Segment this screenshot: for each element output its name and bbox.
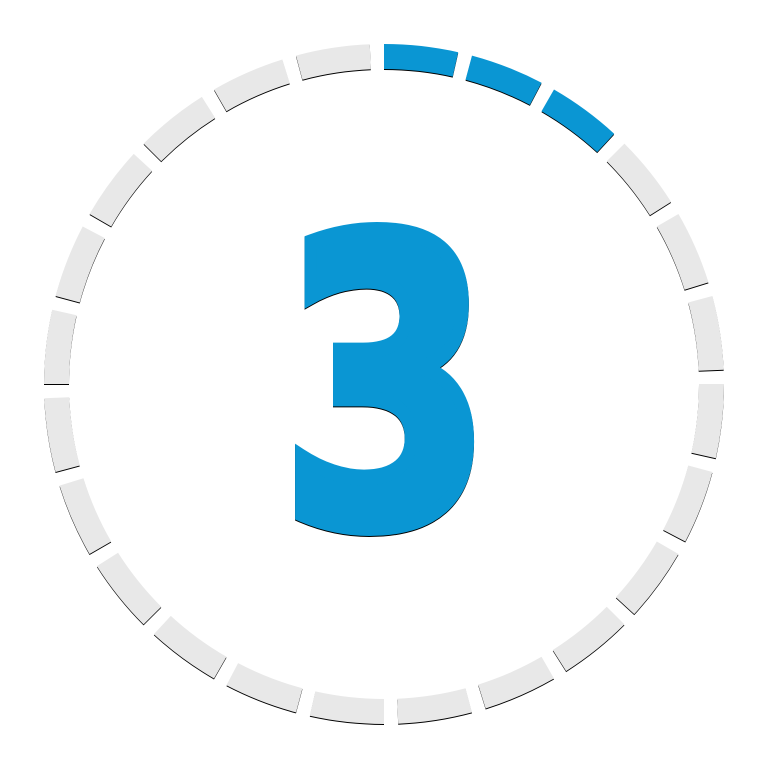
- active blue segments: [384, 44, 618, 155]
- large blue numeral 3: 3: [281, 157, 492, 615]
